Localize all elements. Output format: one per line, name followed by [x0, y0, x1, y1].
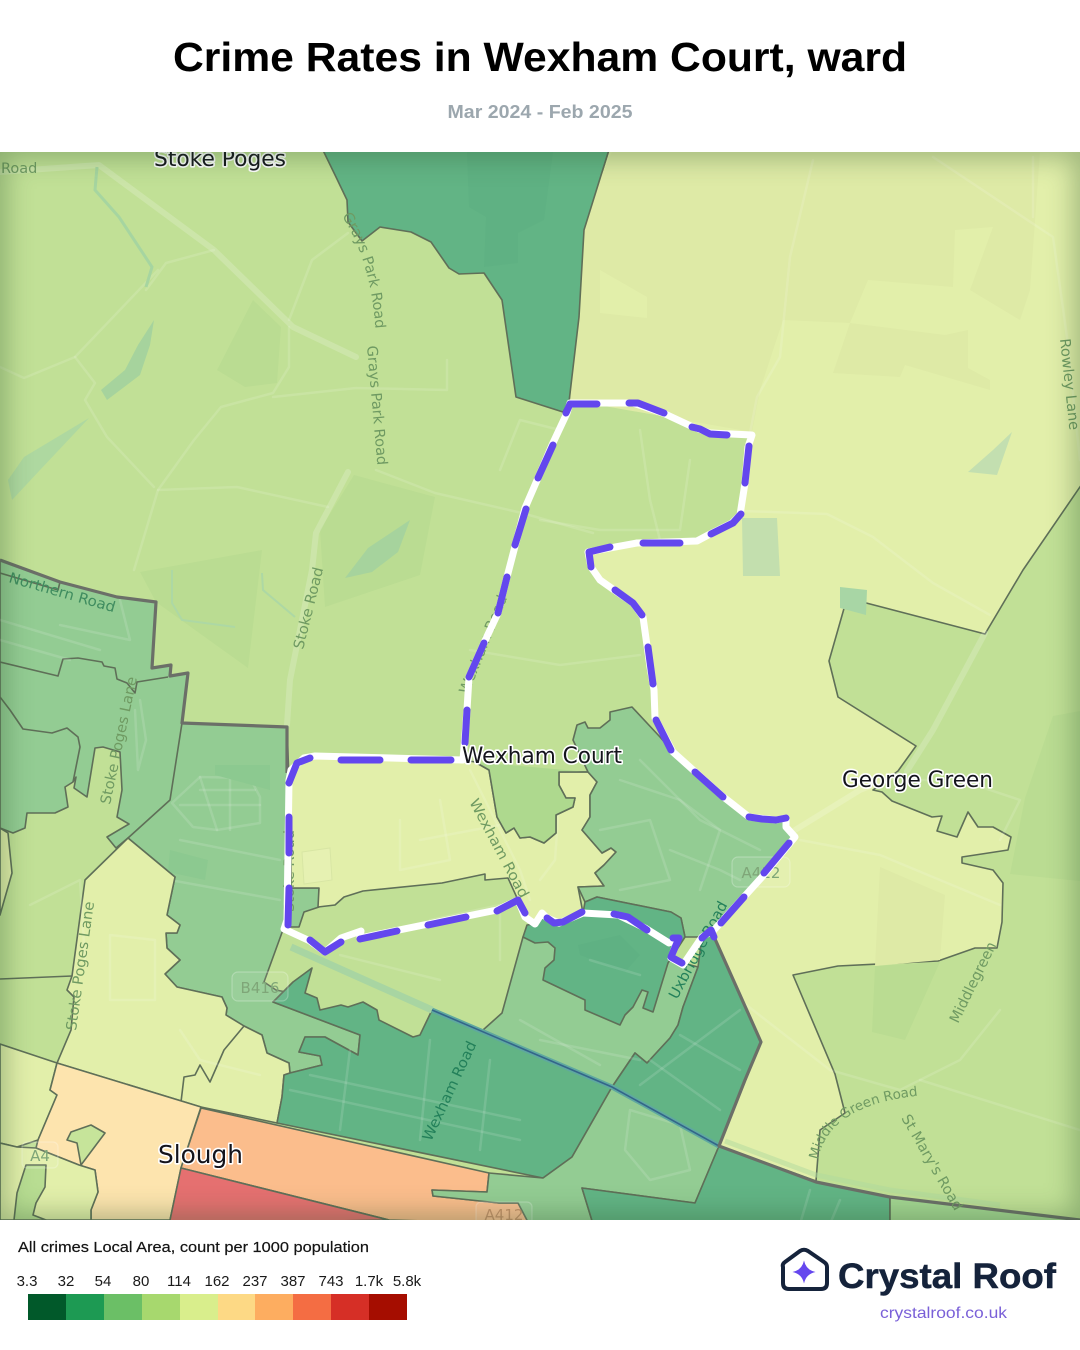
- road labels: Stoke Poges Lane: [64, 901, 98, 1032]
- legend title: All crimes Local Area, count per 1000 population: [18, 1239, 369, 1256]
- region: pale yellow east: [569, 140, 1080, 1181]
- region: orange: [181, 1108, 532, 1224]
- canal line: [432, 1010, 719, 1146]
- region: dark green bottom: [582, 1146, 890, 1224]
- shield: A4: A4: [30, 1147, 50, 1165]
- region: south-east strip: [889, 1198, 1065, 1220]
- thin line around Wexham inner west edge: [475, 762, 588, 843]
- road labels: Grays Park Road: [363, 345, 389, 466]
- region: pale yellow lower-left: [0, 1143, 98, 1220]
- region: mid green south centre: [432, 1087, 719, 1224]
- region: north-west roads and water: [0, 165, 690, 725]
- logo: Crystal Roof: [783, 1250, 1056, 1322]
- road labels: Wexham Road: [465, 796, 531, 901]
- ward outline: purple dashes: [288, 403, 789, 963]
- region: mid green Wexham east: [573, 707, 795, 937]
- region: green island in pale orange: [67, 1125, 105, 1165]
- legend scale labels: 80: [133, 1273, 149, 1290]
- road labels: Stoke Road: [291, 566, 327, 651]
- railway strip: [291, 947, 432, 1010]
- region: mid green rectangle near ward edge: [290, 888, 320, 928]
- shield: A412: A412: [742, 864, 780, 882]
- thick ward boundaries: [0, 560, 1080, 1220]
- road labels: Wexham Road: [420, 1039, 480, 1144]
- road labels: [2, 162, 1078, 1210]
- legend scale labels: 237: [242, 1273, 268, 1290]
- legend scale labels: 32: [58, 1273, 74, 1290]
- shield: B416: B416: [241, 979, 279, 997]
- region: dark green north of Slough: [273, 968, 612, 1178]
- Wexham east streets: [600, 760, 760, 890]
- region: mid green central south: [483, 925, 698, 1087]
- ward interior streets: [302, 770, 560, 900]
- road labels: Wexham Road: [457, 593, 511, 696]
- region: dark green central: [523, 897, 685, 1025]
- road labels: Stoke Poges Lane: [98, 675, 141, 806]
- road labels: Middlegreen: [947, 940, 1000, 1026]
- shield: B416: [232, 972, 288, 1001]
- place label: Stoke Poges: Stoke Poges: [154, 147, 286, 172]
- road labels: Middle Green Road: [808, 1086, 917, 1158]
- region: Wexham Court lighter green interior shading: [480, 762, 580, 842]
- legend: [17, 1239, 422, 1320]
- place label: Wexham Court: Wexham Court: [462, 744, 622, 769]
- base area: light green: [0, 152, 1080, 1220]
- region: pale yellow far west: [0, 1044, 57, 1147]
- icon: house with star: [783, 1250, 827, 1289]
- region: red: [170, 1168, 389, 1224]
- region: pale yellow ward interior: [291, 758, 616, 924]
- subtitle: date range: Mar 2024 - Feb 2025: [448, 102, 632, 122]
- road labels: Stoke Road: [282, 830, 298, 912]
- legend scale labels: 114: [167, 1273, 191, 1290]
- terrain patches: [140, 300, 1080, 1040]
- website link text: crystalroof.co.uk: [880, 1305, 1008, 1322]
- road labels: Grays Park Road: [344, 212, 386, 328]
- legend scale labels: 1.7k: [355, 1273, 384, 1290]
- ward outline: white base: [284, 403, 795, 965]
- title: Crime Rates in Wexham Court, ward: [173, 34, 907, 80]
- region: mid green west: [0, 560, 360, 1073]
- shield: A412: [732, 857, 790, 887]
- pale area streets and internal boundary: [30, 880, 260, 1102]
- legend scale labels: 162: [204, 1273, 230, 1290]
- road labels: Road: [1, 161, 37, 177]
- shield: A412 south: [476, 1202, 532, 1228]
- local street texture in dark and mid greens: [290, 905, 840, 1224]
- legend scale labels: 54: [95, 1273, 111, 1290]
- wordmark: Crystal Roof: [838, 1257, 1056, 1296]
- region: green strip lower-left: [14, 1165, 46, 1220]
- road labels: Uxbridge Road: [666, 899, 731, 1002]
- shield: A4: [22, 1142, 58, 1168]
- region: dark green east of Uxbridge Road: [612, 930, 761, 1146]
- region: pale yellow south-west: [57, 838, 290, 1123]
- place label: George Green: George Green: [842, 768, 993, 793]
- legend colour bar: [28, 1294, 407, 1320]
- place label: Slough: Slough: [158, 1140, 243, 1169]
- legend scale labels: 3.3: [17, 1273, 37, 1290]
- legend scale labels: 387: [280, 1273, 306, 1290]
- legend scale labels: 743: [318, 1273, 344, 1290]
- legend scale labels: 5.8k: [393, 1273, 422, 1290]
- region: pale orange: [36, 1063, 201, 1220]
- west field boundary: [0, 976, 72, 979]
- terrain patches: east fields: [570, 152, 1080, 1130]
- region: dark green north: [318, 140, 612, 412]
- road labels: Northern Road: [7, 570, 117, 616]
- region: far-left pale sliver: [0, 828, 12, 915]
- terrain patch: darker woodland in dark green: [467, 152, 553, 267]
- shield: A412 south: A412: [485, 1206, 523, 1224]
- legend scale labels: [17, 1273, 422, 1290]
- terrain patch: darker field in dark central: [578, 935, 640, 972]
- road labels: St Mary's Road: [898, 1112, 965, 1214]
- internal ward boundaries west: [0, 573, 280, 900]
